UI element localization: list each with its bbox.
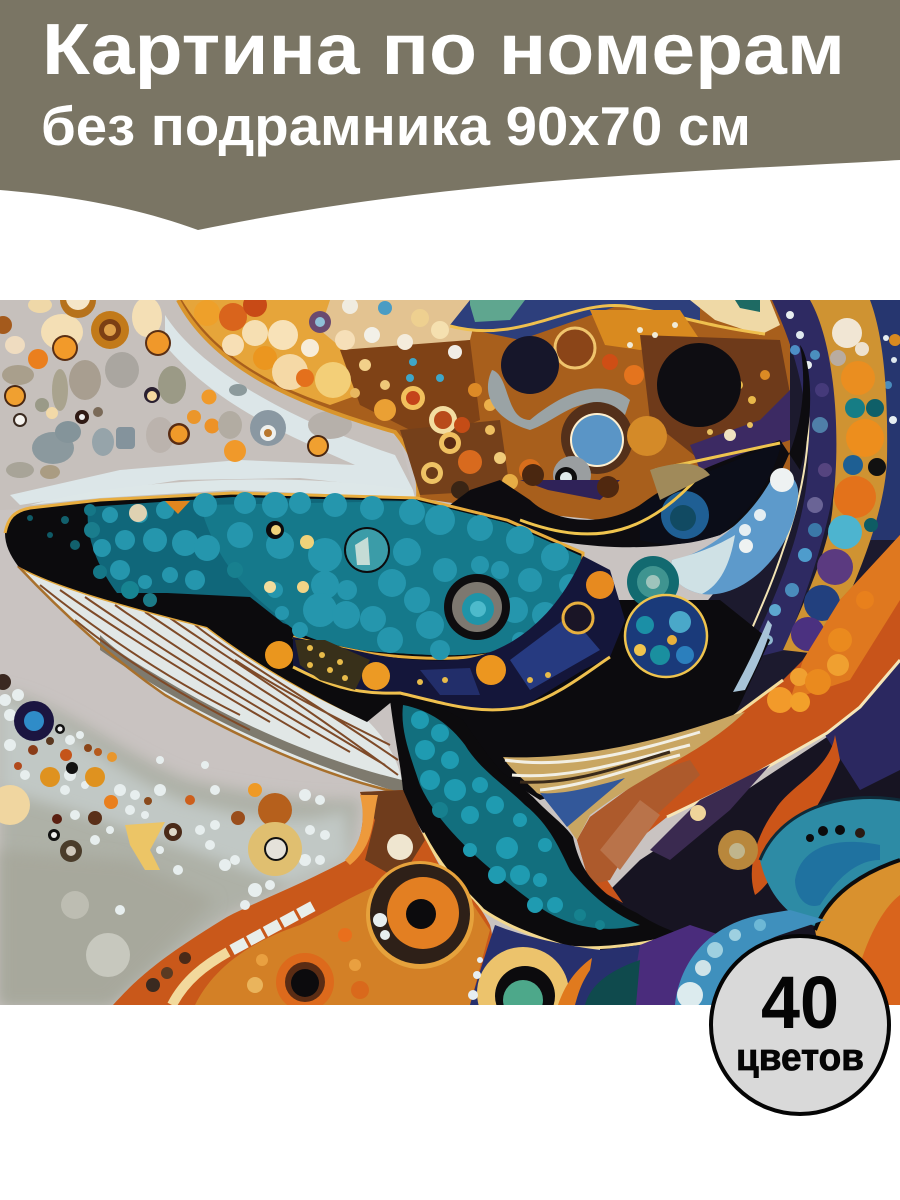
swirl bubble orange xyxy=(627,416,667,456)
orange tail band xyxy=(577,535,900,903)
lower left bubbles xyxy=(0,674,330,977)
orange eye ring large xyxy=(366,861,474,969)
cream tail stripes xyxy=(503,712,745,840)
badge: 40 colours xyxy=(711,936,889,1114)
far right navy dots xyxy=(868,300,900,540)
gold circle band xyxy=(783,300,887,655)
orange pearl 1 xyxy=(265,641,293,669)
bottom orange shape xyxy=(113,790,493,1005)
light blue swoosh xyxy=(671,468,798,594)
whale head and back xyxy=(5,493,610,722)
painting: whale xyxy=(0,282,900,1039)
header banner xyxy=(0,0,900,230)
eye xyxy=(444,574,510,640)
painting background xyxy=(0,300,900,1005)
small bulb xyxy=(718,830,758,870)
title: Картина по номерам xyxy=(42,10,845,90)
blue sphere xyxy=(561,402,633,474)
black crescent xyxy=(450,345,810,547)
dark sphere 2 xyxy=(657,343,741,427)
lower right gold and orange stripes xyxy=(815,860,900,1005)
gold ring bubble xyxy=(563,603,593,633)
whale tail fin xyxy=(390,699,683,948)
orange pearl 2 xyxy=(362,662,390,690)
teal scale cells xyxy=(27,492,581,660)
dark purple streak xyxy=(650,765,770,860)
orange pearl 3 xyxy=(476,655,506,685)
subtitle: без подрамника 90х70 см xyxy=(41,95,751,157)
spiral and fin bubbles xyxy=(625,556,707,677)
top orange mass xyxy=(176,300,790,520)
blue white streak xyxy=(733,620,772,692)
dark right field xyxy=(708,344,896,714)
big teal bubble xyxy=(344,527,390,573)
purple dotted strip xyxy=(752,300,836,656)
teal arc xyxy=(760,798,900,930)
bottom centre ornaments xyxy=(468,925,716,1005)
cream dot xyxy=(690,805,706,821)
badge label: цветов xyxy=(736,1037,864,1079)
black lower body xyxy=(380,600,770,800)
small gold dots on head xyxy=(129,501,314,593)
top left bubbles xyxy=(0,282,352,479)
dark sphere 1 xyxy=(501,336,559,394)
orange pearl 4 xyxy=(586,571,614,599)
flame orange ribbon xyxy=(752,735,840,895)
grey band xyxy=(488,370,630,430)
dark right lower field xyxy=(600,737,900,950)
badge number: 40 xyxy=(761,961,839,1044)
small eye bubble xyxy=(553,456,591,480)
orange eye ring small xyxy=(276,953,334,1005)
navy band with gold specks xyxy=(293,556,625,710)
whale belly xyxy=(18,566,404,794)
light blue arc xyxy=(675,910,825,1008)
